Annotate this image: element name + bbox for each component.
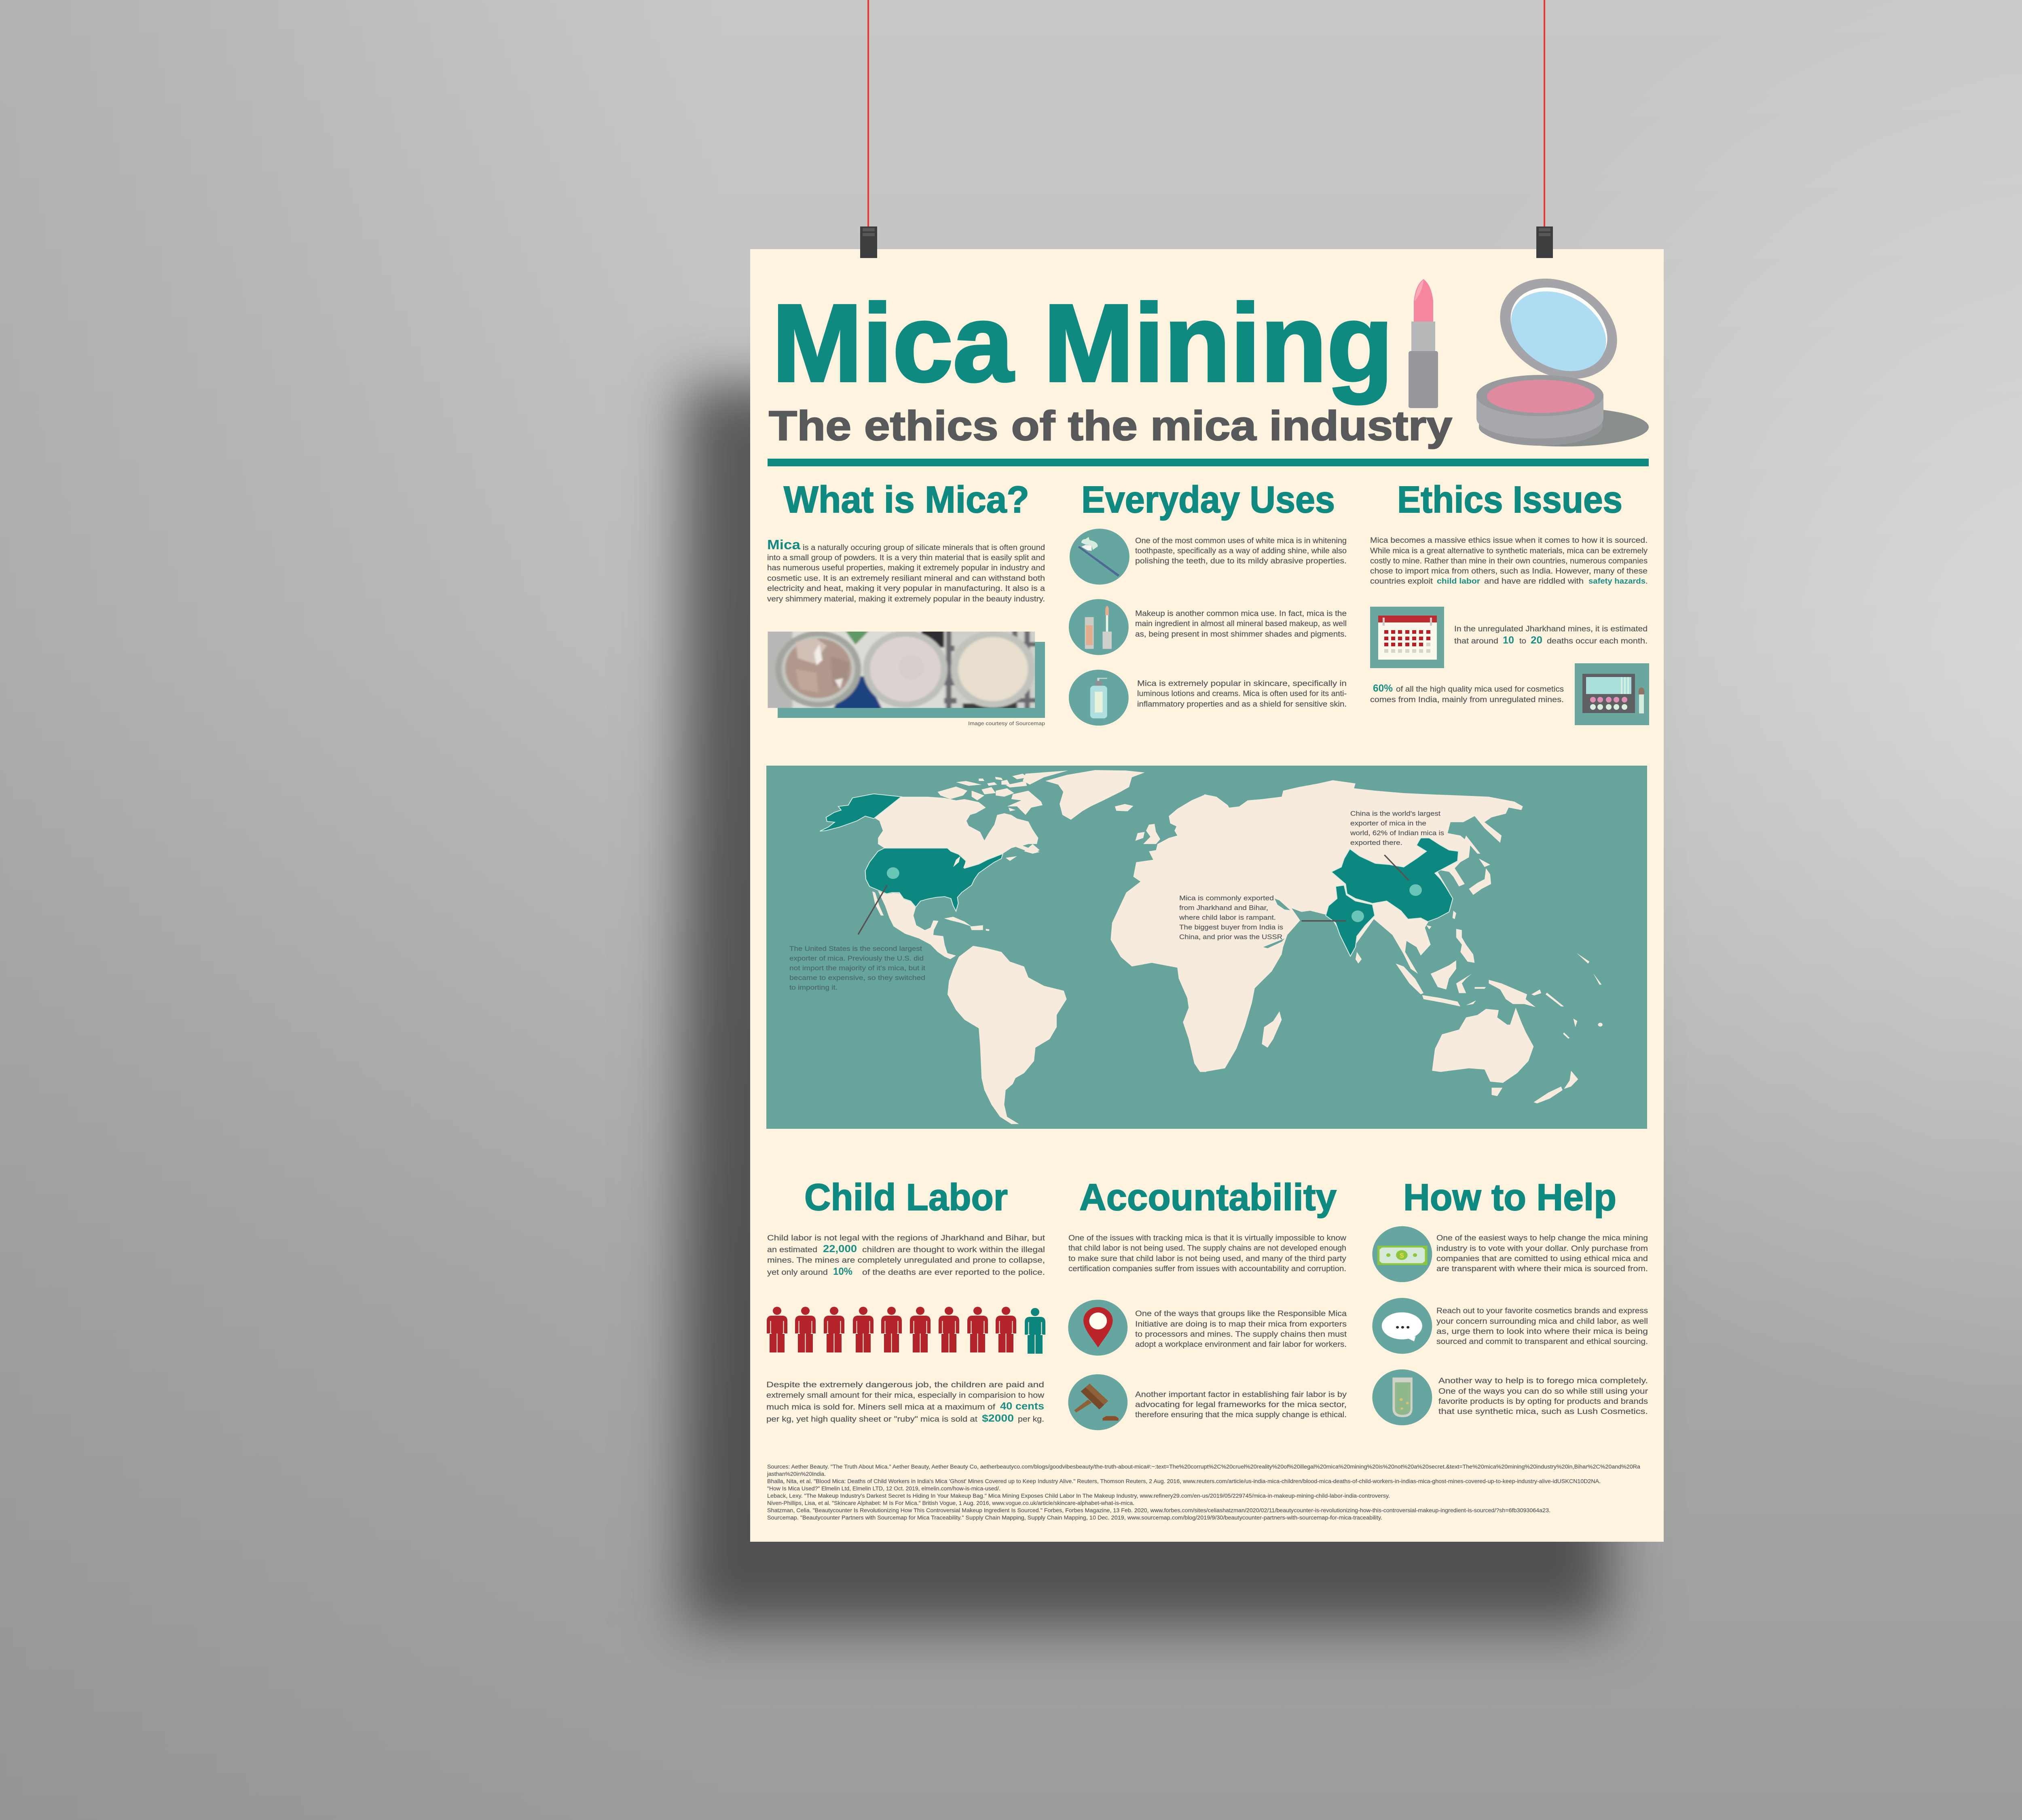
- text: child labor figures: of the deaths are ever reported to the police.: [862, 1268, 1045, 1277]
- text: skincare use: inflammatory properties and as a shield for sensitive skin.: [1137, 700, 1347, 709]
- text block: mica definition: very shimmery material, making it extremely popular in the beauty industry.: [767, 595, 1045, 603]
- icon: dollar bill: [1372, 1226, 1432, 1282]
- panel: accountability: [1068, 1176, 1347, 1430]
- text: legal frameworks: [1135, 1390, 1347, 1419]
- text: pay comparison: per kg, yet high quality sheet or "ruby" mica is sold at: [766, 1415, 978, 1424]
- text: synthetic alternatives: One of the ways you can do so while still using your: [1438, 1387, 1648, 1396]
- text: synthetic alternatives: that use synthetic mica, such as Lush Cosmetics.: [1438, 1407, 1648, 1416]
- photo: three jars of mica: [768, 632, 1035, 708]
- text: deaths per month stat: 10: [1503, 635, 1514, 646]
- heading: accountability: Accountability: [1079, 1176, 1337, 1218]
- map note: India: China, and prior was the USSR: [1179, 933, 1282, 941]
- world map: Asia and Oceania: [1204, 780, 1603, 1103]
- heading: what is mica: What is Mica?: [784, 478, 1029, 521]
- text: synthetic alternatives: Another way to help is to forego mica completely.: [1438, 1377, 1648, 1385]
- text block: mica definition: Mica: [767, 537, 801, 552]
- text: pay comparison: extremely small amount for their mica, especially in comparision to how: [766, 1391, 1044, 1400]
- text: ethics overview: [1370, 536, 1648, 586]
- text: ethics overview: Mica becomes a massive ethics issue when it comes to how it is sourced.: [1370, 536, 1648, 545]
- map note: United States: became to expensive, so they switched: [789, 974, 925, 982]
- text: legal frameworks: therefore ensuring that the mica supply change is ethical.: [1135, 1411, 1347, 1419]
- text: toothpaste use: One of the most common uses of white mica is in whitening: [1135, 537, 1347, 545]
- text: pay comparison: much mica is sold for. Miners sell mica at a maximum of: [766, 1403, 996, 1412]
- map note: India: where child labor is rampant.: [1179, 914, 1276, 921]
- map note: India: The biggest buyer from India is: [1179, 924, 1283, 931]
- map note: United States: [789, 945, 925, 991]
- text: ethics overview: .: [1646, 577, 1648, 586]
- text: synthetic alternatives: favorite products is by opting for products and brands: [1438, 1397, 1648, 1406]
- sources footer: Bhalla, Nita, et al. "Blood Mica: Deaths of Child Workers in India's Mica 'Ghost' Mines Covered up to Keep Industry Alive." Reuters, Thomson Reuters, 2 Aug. 2016, www.reuters.com/article/us-india-mica-children/blood-mica-deaths-of-child-workers-in-indias-mica-ghost-mines-covered-up-to-keep-industry-alive-idUSKCN10D2NA.: [767, 1478, 1601, 1484]
- text: vote with your dollar: companies that are comitted to using ethical mica and: [1436, 1255, 1648, 1263]
- sources footer: Sources: Aether Beauty. "The Truth About Mica." Aether Beauty, Aether Beauty Co, aetherbeautyco.com/blogs/goodvibesbeauty/the-truth-about-mica#:~:text=The%20corrupt%2C%20cruel%20reality%20of%20illegal%20mica%20mining%20is%20not%20a%20secret.&text=The%20mica%20mining%20industry%20in,Bihar%2C%20and%20Ra: [767, 1464, 1641, 1470]
- hanging strings: [867, 0, 1545, 229]
- text: vote with your dollar: One of the easiest ways to help change the mica mining: [1436, 1234, 1648, 1242]
- text: synthetic alternatives: [1438, 1377, 1648, 1416]
- text: mapping supply: adopt a workplace environment and fair labor for workers.: [1135, 1340, 1347, 1349]
- text: ethics overview: and have are riddled with: [1484, 577, 1584, 586]
- text: deaths per month stat: [1454, 625, 1648, 646]
- text: makeup use: Makeup is another common mica use. In fact, mica is the: [1135, 609, 1347, 618]
- text: deaths per month stat: 20: [1531, 635, 1542, 646]
- map note: India: [1179, 895, 1283, 941]
- poster clips: [860, 226, 1553, 258]
- poster sheet: [750, 249, 1664, 1542]
- text: pay comparison: per kg.: [1018, 1415, 1044, 1424]
- heading: everyday uses: Everyday Uses: [1081, 478, 1335, 521]
- map note: China: China is the world's largest: [1350, 810, 1440, 817]
- text: tracking issues: certification companies suffer from issues with accountability and corruption.: [1068, 1265, 1346, 1273]
- marker: China: [1409, 884, 1422, 896]
- map note: United States: exporter of mica. Previously the U.S. did: [789, 955, 924, 962]
- text: contact brands: your concern surrounding mica and child labor, as well: [1436, 1317, 1648, 1326]
- text block: mica definition: has numerous useful properties, making it extremely popular in industry and: [767, 564, 1045, 572]
- icon: compact mirror: [1476, 259, 1649, 447]
- header rule: [768, 459, 1649, 466]
- panel: everyday uses: [1069, 478, 1347, 726]
- marker: United States: [887, 867, 899, 879]
- map panel: [766, 766, 1647, 1129]
- text: tracking issues: [1068, 1234, 1347, 1273]
- text: toothpaste use: [1135, 537, 1347, 565]
- sources footer: Niven-Phillips, Lisa, et al. "Skincare Alphabet: M Is For Mica." British Vogue, 1 Aug. 2016, www.vogue.co.uk/article/skincare-alphabet-what-is-mica.: [767, 1500, 1134, 1506]
- sources footer: "How Is Mica Used?" Elmelin Ltd, Elmelin LTD, 12 Oct. 2019, elmelin.com/how-is-mica-used/.: [767, 1486, 1000, 1492]
- map note: India: Mica is commonly exported: [1179, 895, 1274, 902]
- great lakes: [953, 856, 976, 868]
- text: pay comparison: 40 cents: [1000, 1401, 1044, 1412]
- map note: United States: The United States is the second largest: [789, 945, 922, 952]
- text: makeup use: [1135, 609, 1347, 639]
- panel: ethics issues: [1370, 478, 1649, 725]
- text: mapping supply: [1135, 1310, 1347, 1349]
- sources footer: jasthan%20in%20India.: [767, 1471, 826, 1477]
- poster drop shadow: [683, 384, 1610, 1626]
- text: ethics overview: child labor: [1437, 577, 1481, 586]
- text: ethics overview: While mica is a great alternative to synthetic materials, mica can be extremely: [1370, 547, 1648, 555]
- text: child labor figures: yet only around: [767, 1268, 828, 1277]
- panel: child labor: [766, 1176, 1045, 1424]
- icon: speech bubble: [1372, 1298, 1432, 1354]
- text: ethics overview: safety hazards: [1588, 577, 1646, 586]
- text block: mica definition: into a small group of powders. It is a very thin material that is easily split and: [767, 554, 1045, 562]
- photo caption: Image courtesy of Sourcemap: [968, 720, 1045, 726]
- text: contact brands: as, urge them to look into where their mica is being: [1436, 1327, 1648, 1336]
- map note: United States: not import the majority of it's mica, but it: [789, 965, 925, 972]
- heading: child labor: Child Labor: [804, 1176, 1008, 1218]
- icon: calendar: [1370, 607, 1444, 668]
- pictogram: nine red figures and one teal figure: [767, 1307, 1045, 1354]
- text: child labor figures: Child labor is not legal with the regions of Jharkhand and Bihar, but: [767, 1234, 1045, 1242]
- text: makeup use: as, being present in most shimmer shades and pigments.: [1135, 630, 1347, 639]
- text: deaths per month stat: that around: [1454, 637, 1498, 645]
- text: 60 percent stat: comes from India, mainly from unregulated mines.: [1370, 696, 1564, 704]
- text: contact brands: sourced and commit to transparent and ethical sourcing.: [1436, 1337, 1648, 1346]
- subtitle: The ethics of the mica industry: [769, 402, 1452, 449]
- text: 60 percent stat: 60%: [1373, 683, 1393, 694]
- text: mapping supply: Initiative are doing is to map their mica from exporters: [1135, 1320, 1347, 1329]
- text: legal frameworks: advocating for legal frameworks for the mica sector,: [1135, 1401, 1347, 1409]
- map note: China: [1350, 810, 1444, 847]
- sources footer: [767, 1464, 1641, 1521]
- highlighted country: China: [1331, 838, 1458, 922]
- panel: how to help: [1372, 1176, 1648, 1425]
- text: legal frameworks: Another important factor in establishing fair labor is by: [1135, 1390, 1347, 1399]
- icon: test tube: [1372, 1369, 1432, 1425]
- text block: mica definition: [767, 537, 1045, 603]
- sources footer: Shatzman, Celia. "Beautycounter Is Revolutionizing How This Controversial Makeup Ingredient Is Sourced." Forbes, Forbes Magazine, 13 Feb. 2020, www.forbes.com/sites/celiashatzman/2020/02/11/beautycounter-is-revolutionizing-how-this-controversial-makeup-ingredient-is-sourced/?sh=6fb3093064a23.: [767, 1507, 1550, 1513]
- text: deaths per month stat: to: [1519, 637, 1526, 645]
- text block: mica definition: cosmetic use. It is an extremely resiliant mineral and can withstand both: [767, 574, 1045, 583]
- text: toothpaste use: polishing the teeth, due to its mildy abrasive properties.: [1135, 557, 1347, 565]
- text: tracking issues: One of the issues with tracking mica is that it is virtually impossible to know: [1068, 1234, 1346, 1242]
- highlighted country: Alaska: [820, 794, 901, 831]
- map note: India: from Jharkhand and Bihar,: [1179, 904, 1268, 912]
- text: child labor figures: [767, 1234, 1045, 1277]
- text: contact brands: [1436, 1307, 1648, 1346]
- text block: mica definition: electricity and heat, making it very popular in manufacturing. It also is a: [767, 584, 1045, 593]
- text: skincare use: Mica is extremely popular in skincare, specifically in: [1137, 679, 1347, 688]
- text: deaths per month stat: In the unregulated Jharkhand mines, it is estimated: [1454, 625, 1648, 633]
- map note: United States: to importing it.: [789, 984, 838, 991]
- icon: dollar bill: $: [1400, 1252, 1404, 1259]
- text: ethics overview: chose to import mica from others, such as India. However, many of these: [1370, 567, 1648, 576]
- marker: India: [1352, 910, 1364, 922]
- text: vote with your dollar: are transparent with where their mica is sourced from.: [1436, 1265, 1648, 1273]
- panel: what is mica: [761, 478, 1045, 726]
- map note: China: exported there.: [1350, 839, 1402, 847]
- text: child labor figures: an estimated: [767, 1246, 817, 1254]
- text: mapping supply: to processors and mines. The supply chains then must: [1135, 1330, 1347, 1339]
- leader line: United States: [858, 885, 887, 934]
- map note: China: world, 62% of Indian mica is: [1350, 830, 1444, 837]
- icon: makeup bottle and wand: [1069, 599, 1129, 655]
- text: pay comparison: Despite the extremely dangerous job, the children are paid and: [766, 1381, 1044, 1389]
- text: pay comparison: $2000: [982, 1413, 1014, 1424]
- text: pay comparison: [766, 1381, 1044, 1424]
- text: child labor figures: 22,000: [823, 1243, 857, 1255]
- photo backing block: [778, 642, 1045, 718]
- icon: gavel: [1068, 1374, 1127, 1430]
- text block: mica definition: is a naturally occuring group of silicate minerals that is often ground: [803, 544, 1045, 552]
- title: Mica Mining: [772, 281, 1393, 405]
- text: 60 percent stat: [1370, 683, 1564, 704]
- text: child labor figures: mines. The mines are completely unregulated and prone to collapse,: [767, 1256, 1045, 1265]
- text: ethics overview: costly to mine. Rather than mine in their own countries, numerous companies: [1370, 557, 1648, 565]
- icon: toothbrush: [1070, 529, 1129, 585]
- text: contact brands: Reach out to your favorite cosmetics brands and express: [1436, 1307, 1648, 1315]
- sources footer: Sourcemap. "Beautycounter Partners with Sourcemap for Mica Traceability." Supply Chain Mapping, Supply Chain Mapping, 10 Dec. 2019, www.sourcemap.com/blog/2019/9/30/beautycounter-partners-with-sourcemap-for-mica-traceability.: [767, 1515, 1382, 1521]
- highlighted country: United States: [865, 848, 1003, 911]
- icon: eyeshadow palette: [1575, 663, 1649, 725]
- highlighted country: India: [1326, 885, 1375, 956]
- leader line: India: [1302, 920, 1346, 922]
- icon: lipstick: [1409, 279, 1438, 408]
- map background: [766, 766, 1647, 1129]
- text: ethics overview: countries exploit: [1370, 577, 1433, 586]
- text: 60 percent stat: of all the high quality mica used for cosmetics: [1396, 685, 1564, 694]
- text: skincare use: [1137, 679, 1347, 709]
- text: tracking issues: that child labor is not being used. The supply chains are not developed enough: [1068, 1244, 1346, 1253]
- icon: location pin: [1068, 1299, 1127, 1356]
- text: child labor figures: children are thought to work within the illegal: [862, 1246, 1045, 1254]
- text: mapping supply: One of the ways that groups like the Responsible Mica: [1135, 1310, 1347, 1318]
- world map: Americas and western Old World: [820, 770, 1206, 1124]
- icon: lotion pump bottle: [1069, 670, 1129, 726]
- text: skincare use: luminous lotions and creams. Mica is often used for its anti-: [1137, 690, 1347, 698]
- text: child labor figures: 10%: [833, 1266, 852, 1277]
- text: tracking issues: to make sure that child labor is not being used, and many of the third party: [1068, 1255, 1347, 1263]
- text: deaths per month stat: deaths occur each month.: [1547, 637, 1648, 645]
- map note: China: exporter of mica in the: [1350, 820, 1426, 827]
- text: vote with your dollar: industry is to vote with your dollar. Only purchase from: [1436, 1244, 1648, 1253]
- text: toothpaste use: toothpaste, specifically as a way of adding shine, while also: [1135, 547, 1347, 555]
- leader line: China: [1384, 855, 1409, 880]
- heading: how to help: How to Help: [1403, 1176, 1616, 1218]
- heading: ethics issues: Ethics Issues: [1397, 478, 1622, 521]
- text: vote with your dollar: [1436, 1234, 1648, 1273]
- sources footer: Leback, Lexy. "The Makeup Industry's Darkest Secret Is Hiding In Your Makeup Bag." Mica Mining Exposes Child Labor In The Makeup Industry, www.refinery29.com/en-us/2019/05/229745/mica-in-makeup-mining-child-labor-india-controversy.: [767, 1493, 1390, 1499]
- text: makeup use: main ingredient in almost all mineral based makeup, as well: [1135, 620, 1347, 628]
